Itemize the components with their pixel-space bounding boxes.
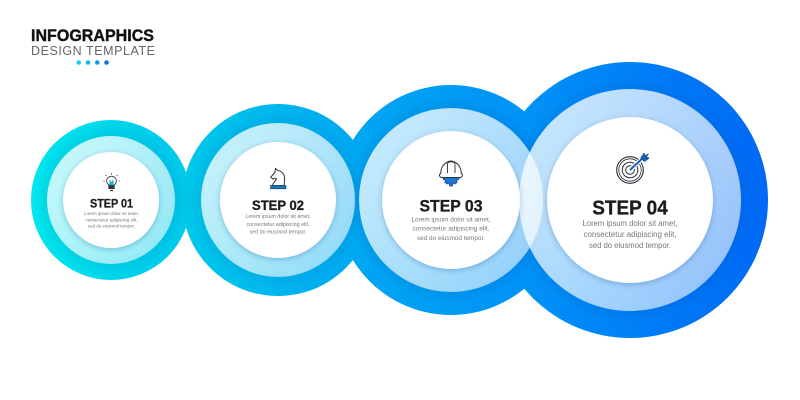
step 01 description [84,211,139,230]
title: infographics: INFOGRAPHICS [31,27,154,45]
white disc 03 [382,131,520,269]
light middle rings [47,89,741,311]
step 04 description: consectetur adipiscing elit, [584,230,676,239]
icon: light bulb [104,173,120,190]
outer blue circles band [31,62,768,338]
decorative dots row [76,60,109,65]
icon: helmet and gear [440,161,462,186]
step 04 description [582,219,678,250]
step 03 heading: STEP 03 [420,198,482,216]
step 01 description: sed do eiusmod tempor. [88,224,135,230]
step 04 description: sed do eiusmod tempor. [589,241,671,250]
panel: step 04 [547,117,713,283]
step 02 heading: STEP 02 [252,197,304,213]
step 03 description: consectetur adipiscing elit, [412,226,490,232]
white disc 04 [547,117,713,283]
panel: step 02 [220,142,336,258]
ring shadows [45,87,743,313]
step 03 description: sed do eiusmod tempor. [417,235,485,242]
step 04 description: Lorem ipsum dolor sit amet, [582,219,678,228]
step 01 description: consectetur adipiscing elit, [86,217,138,223]
panel: step 03 [382,131,520,269]
icon: chess knight [270,168,286,189]
step 01 heading: STEP 01 [90,196,133,210]
title block [31,27,155,65]
step 03 description [412,216,491,242]
step 03 description: Lorem ipsum dolor sit amet, [412,216,491,224]
panel: step 01 [63,152,159,248]
white disc 01 [63,152,159,248]
icon: target with arrow [617,153,649,183]
step 04 heading: STEP 04 [592,198,669,220]
step 02 description: Lorem ipsum dolor sit amet, [246,214,311,220]
white disc 02 [220,142,336,258]
step 02 description: consectetur adipiscing elit, [246,222,310,228]
step 02 description [246,214,311,236]
step 01 description: Lorem ipsum dolor sit amet, [84,211,139,217]
subtitle: design template: DESIGN TEMPLATE [31,44,155,58]
step 02 description: sed do eiusmod tempor. [250,230,307,236]
